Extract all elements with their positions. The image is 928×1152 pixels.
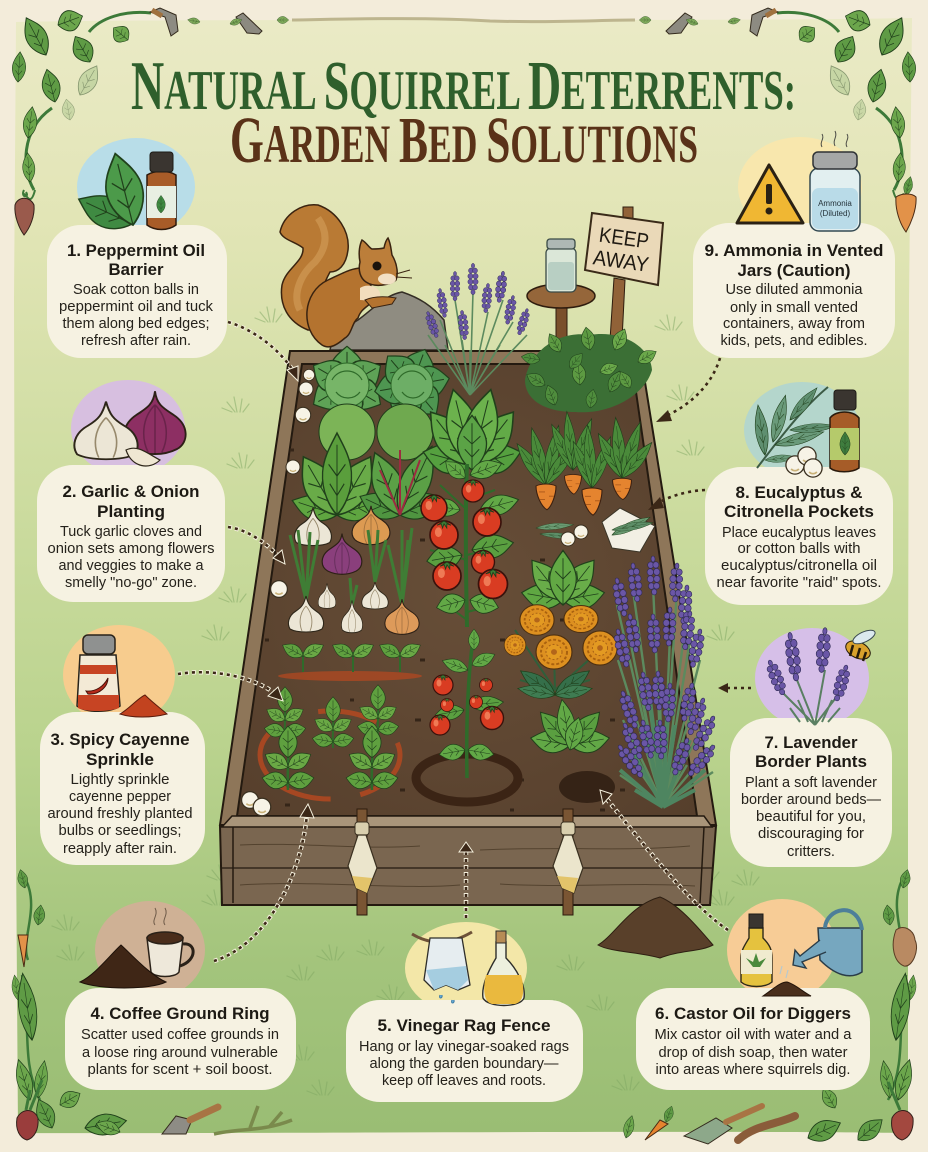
arrow 3 xyxy=(178,672,283,701)
card 1 text: 1. Peppermint Oil xyxy=(67,241,205,260)
icon backdrop: teal xyxy=(744,382,860,478)
top border line xyxy=(292,19,635,22)
title line 1: NATURAL SQUIRREL DETERRENTS: xyxy=(131,48,796,125)
icon: beet upper left xyxy=(15,190,34,235)
card 3 text: Lightly sprinkle xyxy=(70,771,170,788)
keep away sign xyxy=(585,207,663,340)
card 2 text: smelly "no-go" zone. xyxy=(65,574,197,591)
table with jar xyxy=(527,239,595,342)
card 1 text: them along bed edges; xyxy=(62,315,210,332)
soil xyxy=(237,364,697,816)
bottom border left: leaves, trowel, roots xyxy=(31,1087,292,1138)
card 2 xyxy=(37,465,225,602)
arrow 2 xyxy=(228,527,285,564)
card 2 text: onion sets among flowers xyxy=(48,540,214,557)
card 7 text: Border Plants xyxy=(755,752,867,771)
icon backdrop: peach xyxy=(63,625,175,725)
icon: coffee grounds and cup xyxy=(80,908,193,988)
card 5 text: along the garden boundary— xyxy=(370,1055,558,1072)
icon backdrop: yellow xyxy=(738,137,862,237)
chard plant xyxy=(355,440,445,526)
squirrel on rock xyxy=(280,205,448,350)
arrow 8 xyxy=(648,490,705,510)
card 9 text: Use diluted ammonia xyxy=(726,281,863,298)
dirt mound xyxy=(598,897,713,958)
card 7 xyxy=(730,718,892,867)
cabbages xyxy=(306,344,452,426)
card 2 text: Tuck garlic cloves and xyxy=(60,523,202,540)
icon: ammonia jar: Ammonia xyxy=(818,199,852,208)
card 6 xyxy=(636,988,870,1090)
big lavender border xyxy=(610,556,720,807)
panel 6: castor oil for diggers xyxy=(636,899,870,1090)
card 7 text: Plant a soft lavender xyxy=(745,774,877,791)
card 2 text: 2. Garlic & Onion xyxy=(62,482,200,501)
card 1 text: refresh after rain. xyxy=(81,332,191,349)
spinach plant xyxy=(289,433,385,527)
card 3 text: cayenne pepper xyxy=(69,788,171,805)
arrow 5 xyxy=(459,842,473,918)
icon: cayenne shaker and pile xyxy=(77,635,167,717)
pale lettuce behind greens xyxy=(319,404,433,460)
card 4 text xyxy=(81,1004,279,1078)
card 5 text: keep off leaves and roots. xyxy=(382,1072,546,1089)
title line 2: GARDEN BED SOLUTIONS xyxy=(230,104,698,177)
arrow 6 xyxy=(600,790,728,930)
card 9 xyxy=(693,223,895,358)
card 4 text: 4. Coffee Ground Ring xyxy=(90,1004,270,1023)
card 6 text: into areas where squirrels dig. xyxy=(656,1061,850,1078)
rock xyxy=(330,292,448,350)
card 5 text: 5. Vinegar Rag Fence xyxy=(378,1016,550,1035)
herbs top right of bed xyxy=(520,326,659,412)
card 4 text: plants for scent + soil boost. xyxy=(88,1061,272,1078)
card 4 text: Scatter used coffee grounds in xyxy=(81,1026,279,1043)
bottom border right: carrot, trowel, root, leaves xyxy=(621,1085,888,1147)
grass tufts xyxy=(52,307,759,1095)
card 6 text xyxy=(654,1004,852,1078)
card 4 text: a loose ring around vulnerable xyxy=(82,1044,278,1061)
icon: lavender sprigs and bee xyxy=(763,627,877,725)
card 8 text: or cotton balls with xyxy=(738,540,860,557)
card 9 text xyxy=(704,241,884,349)
coffee ground ring xyxy=(416,754,518,802)
card 1 text: Barrier xyxy=(108,260,164,279)
card 1 text xyxy=(59,241,213,349)
icon: garlic and onion xyxy=(74,391,186,466)
card 6 text: drop of dish soap, then water xyxy=(658,1044,848,1061)
panel 1: peppermint oil barrier xyxy=(47,138,227,358)
panel 4: coffee ground ring xyxy=(65,901,296,1090)
raised garden bed frame xyxy=(220,351,716,825)
icon backdrop: peach xyxy=(727,899,837,1001)
marigolds xyxy=(504,605,617,701)
stake and rag left xyxy=(348,809,377,915)
card 8 text: eucalyptus/citronella oil xyxy=(721,557,877,574)
card 7 text: 7. Lavender xyxy=(764,733,858,752)
card 8 xyxy=(705,467,893,605)
icon backdrop: purple xyxy=(71,380,185,476)
eucalyptus pocket on cloth xyxy=(536,508,655,552)
arrow 7 xyxy=(718,683,751,693)
large lettuce xyxy=(418,386,526,479)
leafy plant lower xyxy=(529,698,611,756)
card 8 text: Place eucalyptus leaves xyxy=(722,524,876,541)
card 7 text: beautiful for you, xyxy=(756,808,866,825)
card 9 text: Jars (Caution) xyxy=(738,261,850,280)
icon: eucalyptus branch, cotton and bottle xyxy=(752,385,859,477)
card 2 text xyxy=(48,482,214,591)
card 1 xyxy=(47,225,227,358)
keep away sign: KEEP xyxy=(598,224,650,253)
icon backdrop: tan xyxy=(95,901,205,999)
panel 5: vinegar rag fence xyxy=(346,922,583,1102)
icon backdrop: blue xyxy=(77,138,195,236)
squirrel eye xyxy=(372,262,382,270)
squirrel whiskers xyxy=(396,270,412,278)
card 7 text: critters. xyxy=(787,843,835,860)
icon: warning triangle xyxy=(737,165,803,223)
card 3 text xyxy=(48,730,192,857)
arrow 9 xyxy=(656,358,720,422)
card 9 text: 9. Ammonia in Vented xyxy=(704,241,884,260)
squirrel belly xyxy=(360,286,380,301)
icon backdrop: pale yellow xyxy=(405,922,527,1014)
card 8 text: 8. Eucalyptus & xyxy=(736,483,862,502)
small lettuce xyxy=(520,550,606,612)
arrow 1 xyxy=(228,322,298,381)
soil speckle xyxy=(265,450,625,810)
bed front wall xyxy=(220,816,716,905)
digging hole xyxy=(559,771,615,803)
icon: carrot upper right xyxy=(896,176,916,232)
card 3 xyxy=(40,712,205,865)
tall tomato plant xyxy=(421,456,521,627)
squirrel body xyxy=(307,268,376,347)
card 5 text: Hang or lay vinegar-soaked rags xyxy=(359,1038,569,1055)
card 1 text: peppermint oil and tuck xyxy=(59,298,213,315)
card 7 text: border around beds— xyxy=(741,791,881,808)
card 5 text xyxy=(359,1016,569,1089)
squirrel head xyxy=(359,238,397,285)
icon backdrop: purple xyxy=(755,628,869,728)
title xyxy=(131,48,796,177)
seedling row with cayenne xyxy=(278,640,423,681)
card 4 xyxy=(65,988,296,1090)
icon: rag and vinegar bottle xyxy=(412,931,524,1006)
icon: beet lower left xyxy=(17,1080,42,1140)
icon: ammonia jar: (Diluted) xyxy=(820,209,850,218)
squirrel tail xyxy=(280,205,348,330)
card 9 text: containers, away from xyxy=(723,315,865,332)
squirrel muzzle xyxy=(378,274,396,284)
card 1 text: Soak cotton balls in xyxy=(73,281,199,298)
border vines: lower right xyxy=(877,190,918,1102)
squirrel paw xyxy=(365,297,396,308)
squirrel tail fur xyxy=(297,218,325,310)
border vines: top left corner xyxy=(11,6,289,190)
icon: ammonia jar xyxy=(810,131,860,231)
card 3 text: reapply after rain. xyxy=(63,840,177,857)
panel 3: spicy cayenne sprinkle xyxy=(40,625,205,865)
card 8 text: near favorite "raid" spots. xyxy=(716,574,882,591)
card 3 text: Sprinkle xyxy=(86,750,154,769)
card 6 text: 6. Castor Oil for Diggers xyxy=(655,1004,851,1023)
card 9 text: kids, pets, and edibles. xyxy=(720,332,868,349)
carrots xyxy=(512,411,656,515)
card 3 text: bulbs or seedlings; xyxy=(58,822,182,839)
card 6 text: Mix castor oil with water and a xyxy=(654,1026,852,1043)
card 3 text: around freshly planted xyxy=(48,805,192,822)
stake and rag right xyxy=(553,809,583,915)
panel 8: eucalyptus and citronella pockets xyxy=(705,382,893,605)
icon: peppermint leaves and oil bottle xyxy=(72,149,176,238)
garlic and onion rows xyxy=(288,506,419,634)
small tomato plant xyxy=(430,629,504,778)
card 3 text: 3. Spicy Cayenne xyxy=(50,730,190,749)
cayenne ring with seedlings xyxy=(260,685,400,799)
icon: castor oil bottle and watering can xyxy=(741,910,862,996)
keep away sign: AWAY xyxy=(592,246,650,277)
icon: ginger root lower right xyxy=(893,928,917,966)
arrow 4 xyxy=(214,804,314,961)
lavender clump behind bed xyxy=(423,263,532,395)
cotton balls along bed edge xyxy=(242,369,315,816)
icon: carrot lower left xyxy=(18,935,28,967)
card 2 text: Planting xyxy=(97,502,165,521)
panel 2: garlic and onion planting xyxy=(37,380,225,602)
card 7 text: discouraging for xyxy=(758,825,864,842)
card 8 text xyxy=(716,483,882,591)
card 2 text: and veggies to make a xyxy=(58,557,204,574)
card 7 text xyxy=(741,733,881,860)
panel 7: lavender border plants xyxy=(730,627,892,867)
panel 9: ammonia in vented jars xyxy=(693,131,895,358)
icon: beet lower right xyxy=(888,1082,913,1140)
border vines: top right corner xyxy=(639,6,917,190)
card 8 text: Citronella Pockets xyxy=(724,502,874,521)
card 5 xyxy=(346,1000,583,1102)
border vines: lower left xyxy=(10,190,51,1102)
card 9 text: only in small vented xyxy=(730,299,858,316)
